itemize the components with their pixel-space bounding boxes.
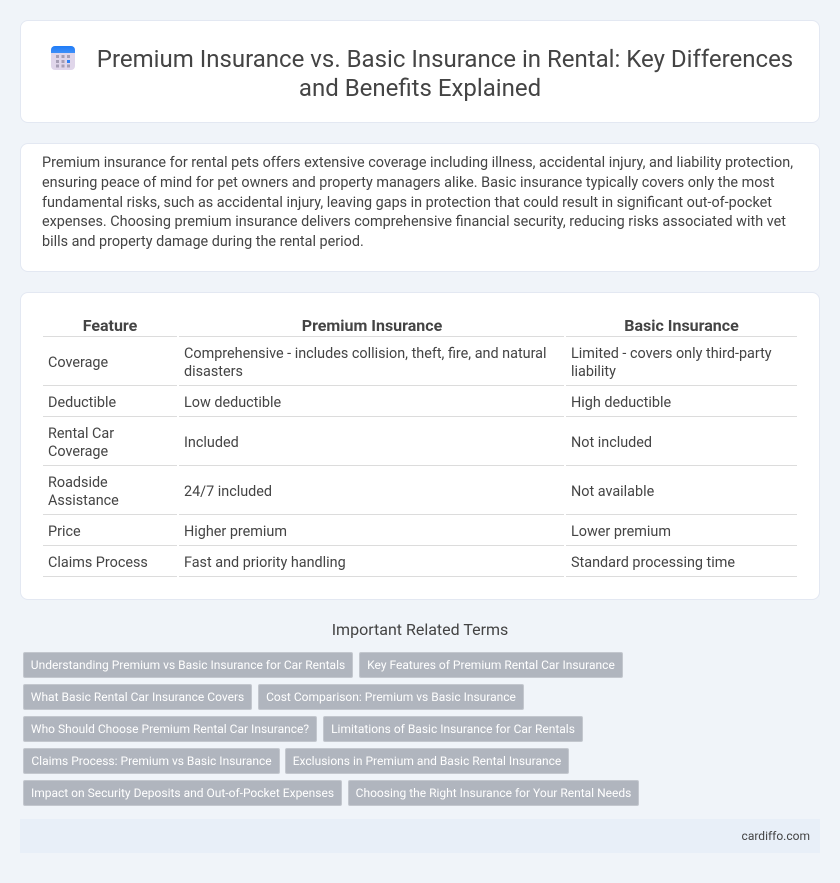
tag	[258, 684, 524, 710]
row: Deductible: Deductible	[48, 394, 116, 411]
row: Rental Car Coverage	[48, 425, 114, 460]
text block: intro paragraph: bills and property damage during the rental period.	[42, 233, 364, 250]
title: Premium Insurance vs. Basic Insurance in Rental: Key Differences	[97, 45, 793, 73]
row: Coverage: Coverage	[48, 354, 108, 371]
tag	[23, 684, 252, 710]
row: Price: Price	[48, 523, 81, 540]
footer bar	[20, 819, 820, 853]
cell: Coverage basic: Limited - covers only third-party	[571, 345, 772, 362]
row: Roadside Assistance: Assistance	[48, 492, 119, 509]
cell: Roadside basic: Not available	[571, 483, 654, 500]
row: Roadside Assistance	[48, 474, 119, 509]
cell: Coverage basic: liability	[571, 363, 616, 380]
cell: Price basic: Lower premium	[571, 523, 671, 540]
tag: Choosing the Right Insurance for Your Rental Needs	[356, 786, 631, 800]
heading: related terms: Important Related Terms	[332, 620, 508, 639]
tag	[323, 716, 583, 742]
tag: Claims Process: Premium vs Basic Insurance	[31, 754, 272, 768]
table header: Basic Insurance: Basic Insurance	[624, 316, 739, 335]
text block: intro paragraph: fundamental risks, such as accidental injury, leaving gaps in protection that could result in significant out-of-pocket	[42, 194, 772, 211]
cell: Rental premium: Included	[184, 434, 239, 451]
row: Rental Car Coverage: Coverage	[48, 443, 108, 460]
tag: Cost Comparison: Premium vs Basic Insurance	[266, 690, 516, 704]
cell: Coverage premium: Comprehensive - includes collision, theft, fire, and natural	[184, 345, 547, 362]
cell: Claims premium: Fast and priority handling	[184, 554, 346, 571]
row: Rental Car Coverage: Rental Car	[48, 425, 114, 442]
tag: Exclusions in Premium and Basic Rental Insurance	[293, 754, 561, 768]
row: Roadside Assistance: Roadside	[48, 474, 108, 491]
tag	[23, 748, 280, 774]
icon: calendar	[51, 46, 75, 70]
title: and Benefits Explained	[299, 74, 541, 102]
text block: intro paragraph: expenses. Choosing premium insurance delivers comprehensive financial security, reducing risks associated with vet	[42, 213, 786, 230]
tag: What Basic Rental Car Insurance Covers	[31, 690, 244, 704]
cell: Rental basic: Not included	[571, 434, 652, 451]
tag: Who Should Choose Premium Rental Car Insurance?	[31, 722, 309, 736]
tag	[348, 780, 639, 806]
title	[97, 45, 793, 102]
row: Claims Process: Claims Process	[48, 554, 148, 571]
cell: Price premium: Higher premium	[184, 523, 287, 540]
tag	[23, 780, 342, 806]
text block: intro paragraph: Premium insurance for rental pets offers extensive coverage including illness, accidental injury, and liability protection,	[42, 154, 793, 171]
cell: Deductible basic: High deductible	[571, 394, 671, 411]
panel: title card	[20, 20, 820, 123]
footer text: cardiffo.com	[742, 829, 810, 843]
cell: Coverage premium: disasters	[184, 363, 243, 380]
tag	[23, 652, 353, 678]
cell: Roadside premium: 24/7 included	[184, 483, 272, 500]
panel: comparison table card	[20, 292, 820, 600]
tag: Limitations of Basic Insurance for Car Rentals	[331, 722, 575, 736]
tag	[359, 652, 623, 678]
tag	[23, 716, 317, 742]
tag	[285, 748, 569, 774]
cell: Claims basic: Standard processing time	[571, 554, 735, 571]
table header: Premium Insurance: Premium Insurance	[302, 316, 442, 335]
cell: Coverage basic	[571, 345, 772, 380]
text block: intro paragraph	[42, 154, 793, 250]
cell: Deductible premium: Low deductible	[184, 394, 281, 411]
cell: Coverage premium	[184, 345, 547, 380]
panel: intro text card	[20, 143, 820, 272]
tag: Understanding Premium vs Basic Insurance for Car Rentals	[31, 658, 345, 672]
text block: intro paragraph: ensuring peace of mind for pet owners and property managers alike. Basic insurance typically covers only the most	[42, 174, 775, 191]
table header: Feature: Feature	[83, 316, 137, 335]
tag: Key Features of Premium Rental Car Insurance	[367, 658, 615, 672]
tag: Impact on Security Deposits and Out-of-Pocket Expenses	[31, 786, 334, 800]
